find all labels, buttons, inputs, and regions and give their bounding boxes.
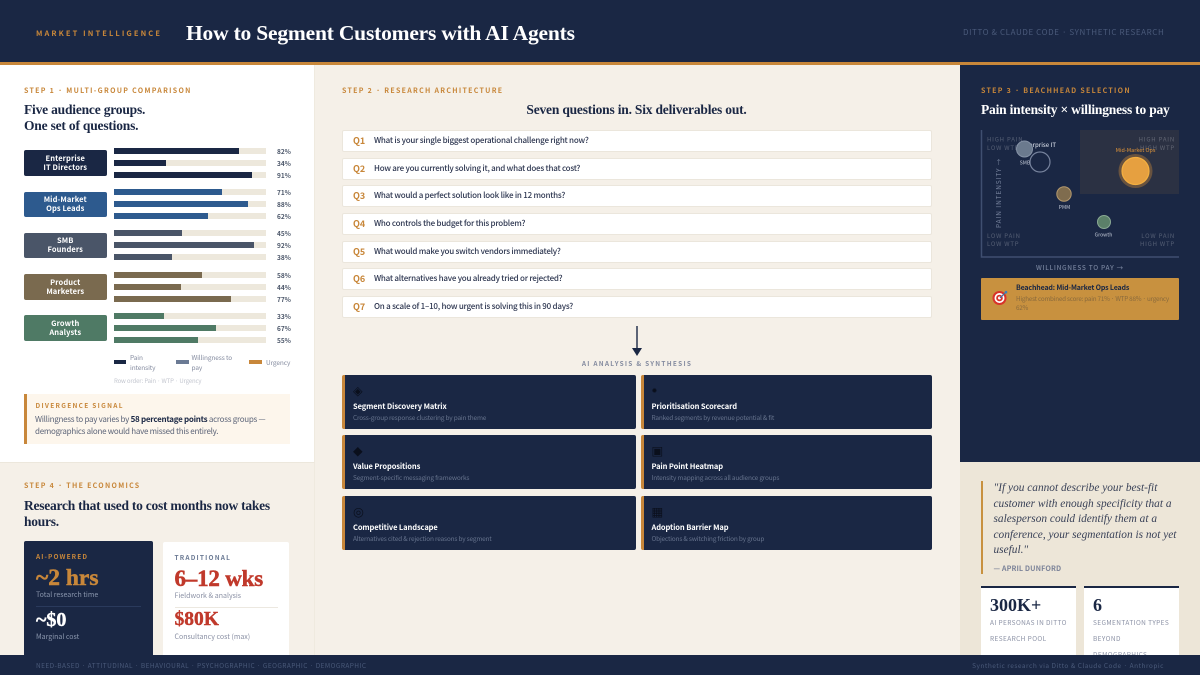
deliverable: segment discovery matrix: Segment Discovery Matrix xyxy=(353,400,447,412)
quote text: useful." xyxy=(994,544,1028,556)
stat caption xyxy=(1093,617,1169,655)
step 1 heading xyxy=(24,102,145,133)
deliverable: prioritisation scorecard: Ranked segments by revenue potential & fit xyxy=(652,412,774,422)
group: SMB founders xyxy=(24,228,291,262)
metric caption: Total research time xyxy=(36,590,98,600)
eyebrow: market intelligence: MARKET INTELLIGENCE xyxy=(36,28,162,38)
panel: step 2 research architecture xyxy=(315,65,960,655)
group: enterprise IT directors: 82% xyxy=(277,146,291,156)
bubble chart: PAIN INTENSITY → xyxy=(993,158,1003,228)
header band xyxy=(0,0,1200,65)
beachhead title: Beachhead: Mid-Market Ops Leads xyxy=(1016,283,1129,293)
deliverable: prioritisation scorecard: Prioritisation Scorecard xyxy=(652,400,737,412)
bubble chart: Growth xyxy=(1095,232,1112,238)
group: product marketers: Marketers xyxy=(46,286,84,297)
bubble chart: PMM xyxy=(1059,204,1070,211)
deliverable: adoption barrier map: Objections & switching friction by group xyxy=(652,533,764,543)
question list: Q7 xyxy=(353,300,365,313)
deliverable: competitive landscape: Competitive Landscape xyxy=(353,522,438,532)
group: growth analysts: Growth xyxy=(51,318,79,329)
question list: Q6 xyxy=(353,272,365,285)
beachhead detail: 62% xyxy=(1016,303,1028,312)
deliverable: prioritisation scorecard: ✹ xyxy=(652,386,657,394)
question list: Q1 xyxy=(353,134,365,147)
question list: Q4 xyxy=(353,217,365,230)
arrow: questions to analysis xyxy=(632,326,642,356)
deliverable: pain point heatmap xyxy=(640,435,932,489)
bubble chart: LOW WTP xyxy=(987,239,1019,248)
deliverable: value propositions xyxy=(342,435,636,489)
stat: segmentation types xyxy=(1084,586,1179,666)
metric caption: Fieldwork & analysis xyxy=(174,590,241,600)
deliverable: segment discovery matrix xyxy=(342,375,636,429)
group: mid-market ops leads: 88% xyxy=(277,199,291,209)
deliverable: value propositions: Segment-specific messaging frameworks xyxy=(353,472,469,482)
group: SMB founders: SMB xyxy=(57,235,74,246)
group: product marketers: 58% xyxy=(277,270,291,280)
step 1 heading: One set of questions. xyxy=(24,118,138,133)
metric caption: Consultancy cost (max) xyxy=(174,632,250,642)
deliverable: adoption barrier map xyxy=(640,496,932,550)
deliverable: adoption barrier map: ▦ xyxy=(652,504,663,518)
deliverable: pain point heatmap: Intensity mapping across all audience groups xyxy=(652,472,779,482)
group: SMB founders: 38% xyxy=(277,252,291,262)
bubble chart: HIGH PAIN xyxy=(987,134,1023,144)
step 3 heading: Pain intensity × willingness to pay xyxy=(981,102,1170,117)
stat caption xyxy=(990,617,1067,643)
metric: research time: ~2 hrs xyxy=(36,565,98,591)
bubble chart xyxy=(980,130,1179,258)
group: growth analysts: Analysts xyxy=(49,327,81,338)
stat caption: SEGMENTATION TYPES xyxy=(1093,617,1169,627)
stat caption: RESEARCH POOL xyxy=(990,633,1047,643)
callout text xyxy=(35,414,266,436)
bubble chart: Mid-Market Ops xyxy=(1116,146,1156,154)
question list: On a scale of 1–10, how urgent is solving this in 90 days? xyxy=(374,301,573,312)
legend: intensity xyxy=(130,362,155,372)
group: SMB founders: 45% xyxy=(277,228,291,238)
panel: quote and stats xyxy=(960,462,1200,655)
deliverable: value propositions: Value Propositions xyxy=(353,460,420,472)
question list: What would make you switch vendors immediately? xyxy=(374,246,561,257)
group: growth analysts: 33% xyxy=(277,311,291,321)
card label: TRADITIONAL xyxy=(174,552,231,562)
group: growth analysts: 55% xyxy=(277,335,291,345)
stat caption: BEYOND xyxy=(1093,633,1121,643)
bubble chart: LOW PAIN xyxy=(987,231,1021,240)
legend: Urgency xyxy=(266,357,290,367)
quote text: customer with enough specificity that a xyxy=(994,498,1172,510)
legend xyxy=(114,352,290,385)
step 1 heading: Five audience groups. xyxy=(24,102,145,117)
question list xyxy=(342,130,932,318)
deliverable: pain point heatmap: ▣ xyxy=(652,442,663,458)
step 4 label: STEP 4 · THE ECONOMICS xyxy=(24,481,140,491)
deliverable: pain point heatmap: Pain Point Heatmap xyxy=(652,460,723,472)
quote text: "If you cannot describe your best-fit xyxy=(994,482,1157,494)
deliverable: segment discovery matrix: Cross-group response clustering by pain theme xyxy=(353,412,486,422)
quote text xyxy=(994,482,1177,556)
quote attribution: — APRIL DUNFORD xyxy=(994,564,1061,574)
beachhead detail: Highest combined score: pain 71% · WTP 88% · urgency xyxy=(1016,294,1169,303)
legend: Pain xyxy=(130,352,143,362)
legend: Willingness to xyxy=(192,352,232,362)
deliverable: competitive landscape: Alternatives cited & rejection reasons by segment xyxy=(353,533,492,543)
stat value: 6 xyxy=(1093,595,1102,615)
group: product marketers xyxy=(24,270,291,304)
footer band xyxy=(0,654,1200,675)
bubble chart: Enterprise IT xyxy=(1020,140,1056,149)
group: product marketers: Product xyxy=(50,277,80,288)
group: enterprise IT directors xyxy=(24,146,291,180)
group: mid-market ops leads: 71% xyxy=(277,187,291,197)
group: growth analysts xyxy=(24,311,291,345)
stat caption: AI PERSONAS IN DITTO xyxy=(990,617,1067,627)
group: growth analysts: 67% xyxy=(277,323,291,333)
group: enterprise IT directors: 34% xyxy=(277,158,291,168)
quote text: conference, your segmentation is not yet xyxy=(994,528,1176,540)
header source note: DITTO & CLAUDE CODE · SYNTHETIC RESEARCH xyxy=(963,27,1164,38)
quote text: salesperson could identify them at a xyxy=(994,513,1157,525)
legend: Row order: Pain · WTP · Urgency xyxy=(114,376,201,385)
deliverable: prioritisation scorecard xyxy=(640,375,932,429)
question list: Q3 xyxy=(353,189,365,202)
metric caption: Marginal cost xyxy=(36,632,79,642)
metric: marginal cost: ~$0 xyxy=(36,609,66,631)
deliverable: adoption barrier map: Adoption Barrier Map xyxy=(652,522,728,532)
step 1 label: STEP 1 · MULTI-GROUP COMPARISON xyxy=(24,86,192,96)
question list: What would a perfect solution look like in 12 months? xyxy=(374,190,565,201)
step 3 label: STEP 3 · BEACHHEAD SELECTION xyxy=(981,86,1131,96)
legend: pay xyxy=(192,362,202,372)
callout: beachhead xyxy=(981,278,1179,320)
footer credit: Synthetic research via Ditto & Claude Code · Anthropic xyxy=(972,660,1164,670)
group: enterprise IT directors: 91% xyxy=(277,170,291,180)
question list: How are you currently solving it, and what does that cost? xyxy=(374,163,580,174)
group: mid-market ops leads: Ops Leads xyxy=(46,203,84,214)
question list: Q2 xyxy=(353,162,365,175)
group: enterprise IT directors: IT Directors xyxy=(43,162,87,173)
synthesis label: AI ANALYSIS & SYNTHESIS xyxy=(582,358,692,368)
card: traditional xyxy=(163,542,289,662)
question list: What is your single biggest operational challenge right now? xyxy=(374,135,589,146)
panel: step 3 beachhead selection xyxy=(960,65,1200,462)
stat value: 300K+ xyxy=(990,595,1041,615)
bubble chart: LOW PAIN xyxy=(1141,231,1175,240)
question list: What alternatives have you already tried or rejected? xyxy=(374,273,562,284)
panel: step 4 economics xyxy=(0,462,315,655)
deliverable: competitive landscape xyxy=(342,496,636,550)
bubble chart: HIGH WTP xyxy=(1140,143,1175,152)
step 4 heading: Research that used to cost months now takes hours. xyxy=(24,498,270,528)
stat: personas xyxy=(981,586,1076,666)
metric: fieldwork: 6–12 wks xyxy=(174,566,263,591)
deliverable: segment discovery matrix: ◈ xyxy=(353,382,363,398)
group: product marketers: 77% xyxy=(277,294,291,304)
card label: AI-POWERED xyxy=(36,551,88,561)
callout: divergence signal xyxy=(24,394,290,444)
step 2 heading: Seven questions in. Six deliverables out. xyxy=(526,102,747,117)
group: enterprise IT directors: Enterprise xyxy=(45,153,85,164)
group: product marketers: 44% xyxy=(277,282,291,292)
quote block xyxy=(981,481,1181,574)
question list: Who controls the budget for this problem? xyxy=(374,218,525,229)
group: SMB founders: 92% xyxy=(277,240,291,250)
card: AI-powered xyxy=(24,541,153,661)
step 2 label: STEP 2 · RESEARCH ARCHITECTURE xyxy=(342,86,503,96)
group: SMB founders: Founders xyxy=(48,244,83,255)
title: How to Segment Customers with AI Agents xyxy=(186,21,575,45)
deliverable: value propositions: ◆ xyxy=(353,442,363,458)
callout label: DIVERGENCE SIGNAL xyxy=(36,400,124,410)
callout text: Willingness to pay varies by 58 percentage points across groups — xyxy=(35,414,265,424)
panel: step 1 multi-group comparison xyxy=(0,65,315,462)
group: mid-market ops leads: Mid-Market xyxy=(44,194,87,205)
bubble chart: HIGH WTP xyxy=(1140,239,1175,248)
footer segmentation list: NEED-BASED · ATTITUDINAL · BEHAVIOURAL · PSYCHOGRAPHIC · GEOGRAPHIC · DEMOGRAPHIC xyxy=(36,660,366,670)
beachhead detail xyxy=(1016,294,1169,312)
bubble chart: SMB xyxy=(1020,160,1031,166)
group: mid-market ops leads xyxy=(24,187,291,221)
group: mid-market ops leads: 62% xyxy=(277,211,291,221)
icon: target xyxy=(992,290,1008,305)
metric: consultancy: $80K xyxy=(174,609,219,630)
callout text: demographics alone would have missed this entirely. xyxy=(35,426,218,436)
bubble chart: LOW WTP xyxy=(987,143,1019,152)
question list: Q5 xyxy=(353,245,365,258)
x-axis label: WILLINGNESS TO PAY → xyxy=(1036,262,1124,272)
deliverable: competitive landscape: ◎ xyxy=(353,504,364,518)
bubble chart: HIGH PAIN xyxy=(1139,134,1175,144)
